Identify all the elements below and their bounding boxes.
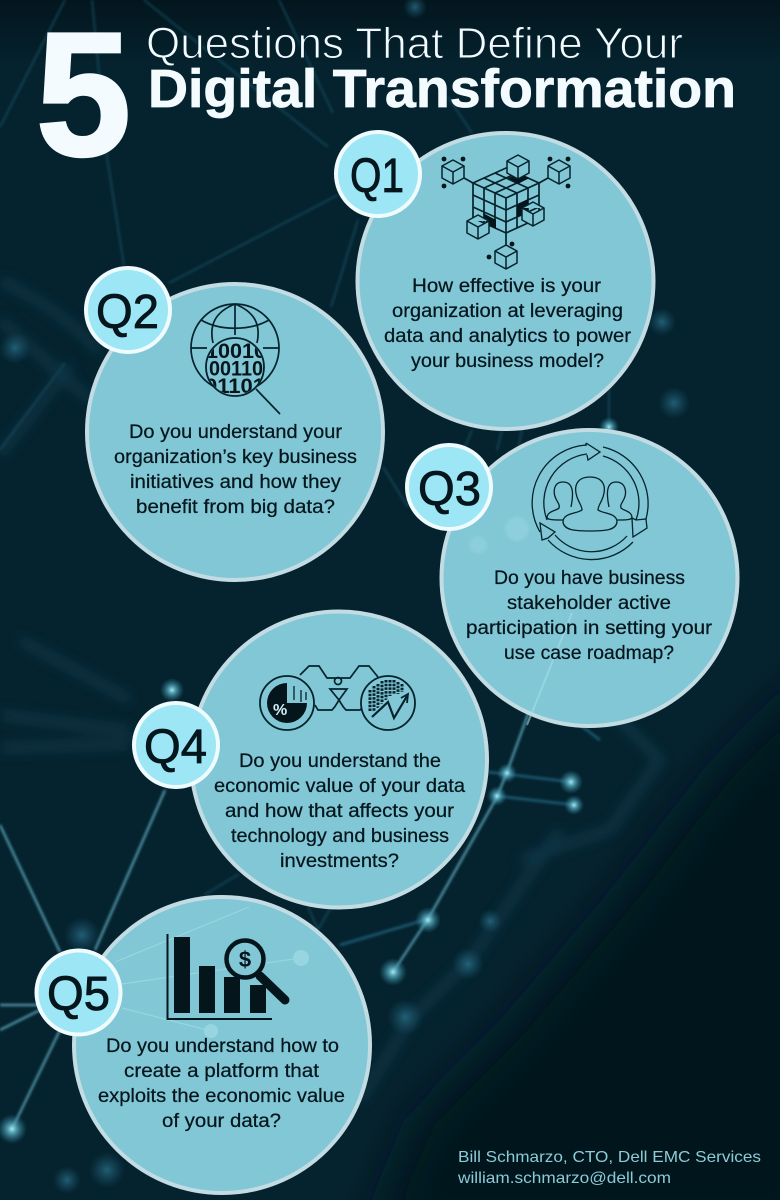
badge: Q3: Q3 [418, 463, 481, 516]
icon: binoculars with charts [260, 666, 415, 730]
badge: Q4 [134, 703, 218, 787]
question text: Do you understand the [239, 750, 441, 772]
circle [191, 612, 487, 908]
credit text [457, 1149, 761, 1187]
badge: Q2 [86, 268, 170, 352]
circle [358, 133, 654, 429]
panel: question 3 [442, 430, 738, 726]
question text: organization’s key business [114, 446, 357, 468]
question text: Do you have business [494, 567, 685, 589]
faint network lines inside panel [115, 907, 309, 1038]
circle [442, 430, 738, 726]
question text: technology and business [231, 825, 449, 847]
title line 1: Questions That Define Your [146, 19, 683, 68]
circle [87, 284, 383, 580]
badge: Q5 [36, 950, 120, 1034]
question text: economic value of your data [214, 775, 465, 797]
question text: How effective is your [412, 275, 602, 297]
big numeral 5: 5 [36, 0, 131, 193]
panel: question 2 [87, 284, 383, 580]
icon: globe with binary magnifier: 10010 [206, 340, 266, 363]
badge: Q5: Q5 [47, 968, 110, 1021]
title [36, 0, 736, 193]
question text: investments? [280, 850, 399, 872]
question text [214, 750, 465, 872]
badge: Q1 [336, 132, 420, 216]
icon: globe with binary magnifier [191, 304, 280, 414]
question text: use case roadmap? [504, 642, 674, 664]
badge: Q1: Q1 [350, 150, 404, 203]
question text: create a platform that [124, 1060, 320, 1082]
question text: data and analytics to power [384, 325, 632, 347]
question text: benefit from big data? [136, 496, 335, 518]
panel: question 1 [358, 133, 654, 429]
panel: question 4 [191, 612, 487, 908]
badge: Q4: Q4 [144, 721, 207, 774]
credit text: Bill Schmarzo, CTO, Dell EMC Services [458, 1149, 761, 1166]
question text: exploits the economic value [98, 1085, 345, 1107]
icon: bar chart with dollar magnifier [168, 934, 285, 1019]
icon: data cube [442, 155, 570, 269]
question text: and how that affects your [225, 800, 455, 822]
question text: participation in setting your [466, 617, 713, 639]
circle [74, 897, 370, 1193]
question text: stakeholder active [507, 592, 671, 614]
badge: Q2: Q2 [96, 286, 159, 339]
question text [98, 1035, 345, 1132]
faint network glow inside panel [469, 517, 572, 725]
credit text: william.schmarzo@dell.com [457, 1170, 671, 1187]
question text [466, 567, 713, 664]
panel: question 5 [74, 897, 370, 1193]
question text: Do you understand how to [106, 1035, 339, 1057]
question text: organization at leveraging [392, 300, 623, 322]
question text [114, 421, 357, 518]
icon: binoculars with charts: % [273, 702, 287, 719]
icon: globe with binary magnifier: 01101 [205, 375, 265, 398]
title line 2: Digital Transformation [148, 59, 736, 119]
badge: Q3 [407, 445, 491, 529]
icon: globe with binary magnifier: 00110 [209, 358, 263, 380]
question text: of your data? [162, 1110, 281, 1132]
question text [384, 275, 632, 372]
question text: your business model? [411, 350, 604, 372]
question text: Do you understand your [129, 421, 343, 443]
question text: initiatives and how they [130, 471, 341, 493]
icon: stakeholders in cycle [532, 443, 648, 560]
icon: bar chart with dollar magnifier: $ [239, 947, 251, 972]
